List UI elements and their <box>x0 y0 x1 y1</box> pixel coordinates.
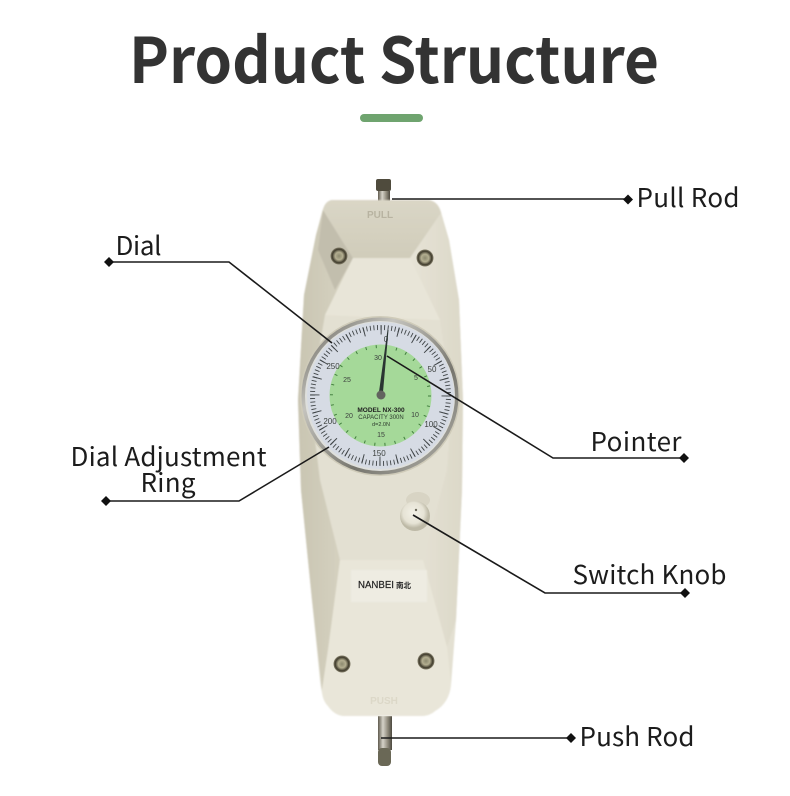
callout: Switch Knob: Switch Knob <box>572 555 726 592</box>
callout: Pointer <box>387 356 689 463</box>
dial numbers: 0 <box>384 335 389 344</box>
callout: Push Rod: Push Rod <box>580 717 694 754</box>
embossed PULL mark: PULL <box>367 210 393 221</box>
dial numbers: 10 <box>411 412 419 419</box>
model text <box>357 407 405 428</box>
callout: Pointer: Pointer <box>590 422 682 459</box>
dial numbers: 100 <box>424 420 438 429</box>
pointer <box>376 330 388 400</box>
screws <box>330 248 434 672</box>
NANBEI brand label <box>351 570 427 602</box>
model text: d=2.0N <box>372 422 390 428</box>
callout: Dial: Dial <box>116 226 162 263</box>
gauge body <box>298 200 463 716</box>
dial numbers: 15 <box>377 432 385 439</box>
callout: Pull Rod <box>392 178 740 215</box>
callout: Dial Adjustment Ring: Ring <box>140 463 196 500</box>
model text: CAPACITY 300N <box>358 415 404 421</box>
title: Product Structure <box>129 11 659 102</box>
dial numbers: 30 <box>374 355 382 362</box>
switch knob <box>400 492 430 531</box>
callout: Dial Adjustment Ring: Dial Adjustment <box>70 437 267 474</box>
dial numbers: 25 <box>343 377 351 384</box>
NANBEI brand label: NANBEI <box>358 580 394 591</box>
callout: Switch Knob <box>413 515 726 598</box>
dial numbers: 250 <box>326 362 340 371</box>
model text: MODEL NX-300 <box>357 407 405 414</box>
dial <box>300 316 460 476</box>
dial numbers: 20 <box>345 413 353 420</box>
green title accent bar <box>360 114 423 122</box>
pull rod <box>376 179 391 201</box>
callout: Push Rod <box>381 717 694 754</box>
embossed PUSH mark: PUSH <box>370 696 398 707</box>
dial numbers <box>323 335 438 458</box>
callout: Pull Rod: Pull Rod <box>636 178 740 215</box>
push rod <box>378 716 392 766</box>
product: push-pull force gauge <box>298 179 463 766</box>
dial numbers: 150 <box>372 449 386 458</box>
NANBEI brand label: 南北 <box>396 580 411 591</box>
dial numbers: 50 <box>428 365 437 374</box>
dial numbers: 200 <box>323 417 337 426</box>
dial numbers: 5 <box>414 375 418 382</box>
callout: Dial <box>104 226 332 343</box>
callout: Dial Adjustment Ring <box>70 437 329 506</box>
